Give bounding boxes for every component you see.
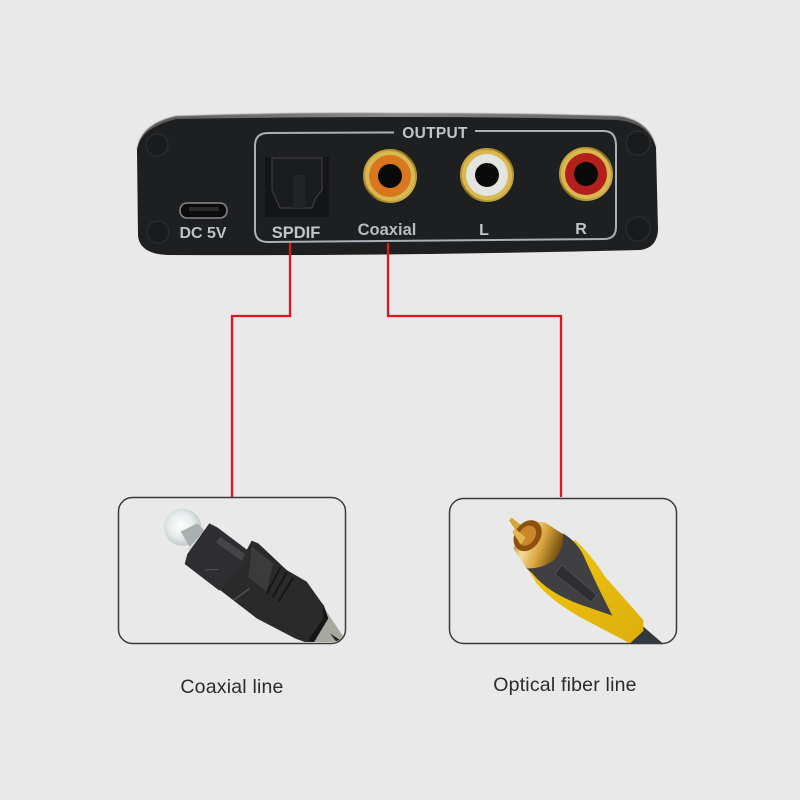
icon: optical plug	[164, 509, 350, 647]
plug head	[185, 523, 247, 591]
screws	[146, 131, 650, 243]
output heading: OUTPUT	[402, 125, 468, 142]
DC 5V label: DC 5V	[179, 225, 227, 242]
device top edge highlight	[137, 113, 656, 150]
yellow housing	[528, 540, 643, 643]
center pin	[509, 518, 520, 530]
connector line: coaxial to right panel	[388, 243, 561, 497]
output frame	[255, 131, 616, 242]
device: audio converter rear panel	[137, 113, 658, 255]
brand plate	[555, 565, 597, 602]
SPDIF optical port	[265, 157, 329, 217]
left RCA jack	[461, 149, 513, 201]
connector line: SPDIF to left panel	[232, 243, 290, 497]
cable	[314, 610, 343, 642]
R label: R	[575, 221, 587, 238]
caption: optical fiber line: Optical fiber line	[493, 674, 637, 696]
cable	[630, 626, 662, 643]
SPDIF label: SPDIF	[272, 224, 320, 242]
right RCA jack	[560, 148, 612, 200]
caption: coaxial line: Coaxial line	[180, 676, 284, 698]
L label: L	[479, 222, 489, 239]
gold collar	[514, 520, 542, 552]
grey housing	[526, 534, 612, 616]
plug body	[220, 541, 327, 644]
gold shell	[513, 521, 563, 568]
panel: left plug	[118, 498, 350, 647]
device body	[137, 117, 658, 255]
panel: right plug	[450, 498, 676, 647]
micro USB port	[180, 203, 227, 218]
ferrule glass	[164, 509, 201, 546]
coaxial RCA jack	[364, 150, 416, 202]
coaxial label: Coaxial	[358, 221, 416, 239]
icon: RCA plug	[508, 515, 667, 647]
